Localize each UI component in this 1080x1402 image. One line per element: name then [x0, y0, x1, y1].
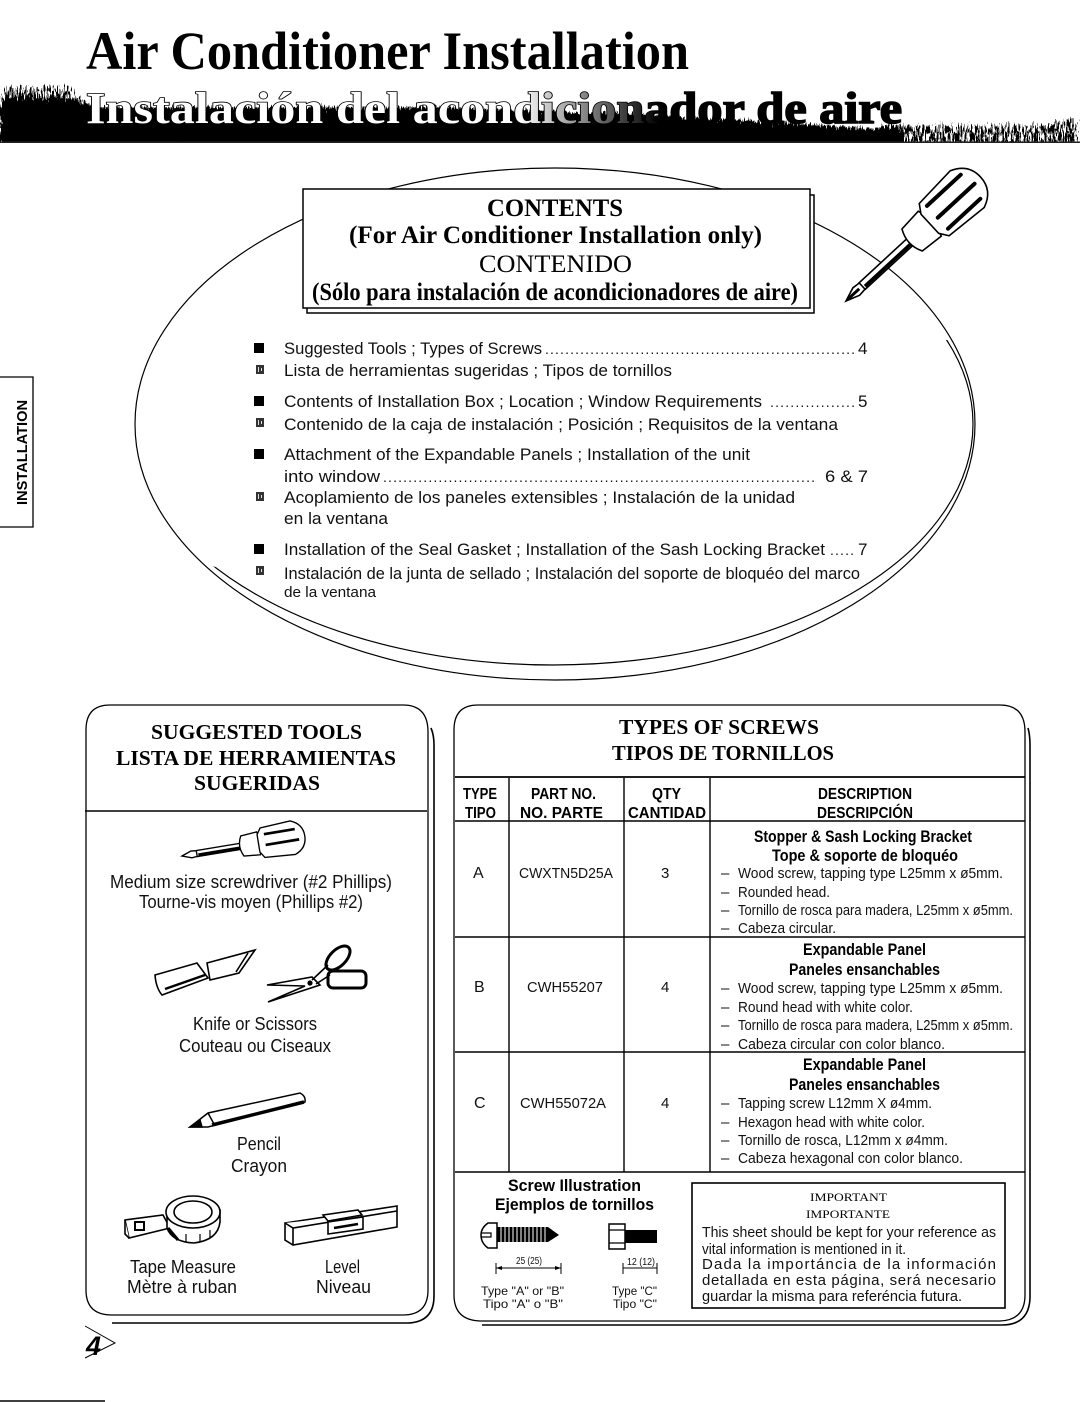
caption: tape measure: Mètre à ruban	[127, 1277, 237, 1297]
caption: screw types: Type "A" or "B"	[481, 1284, 564, 1298]
icon: tape measure	[125, 1196, 220, 1243]
caption: screw types: Tipo "C"	[613, 1297, 657, 1311]
row B: –	[721, 999, 730, 1016]
tools heading: SUGGESTED TOOLS	[151, 720, 362, 744]
row A: Wood screw, tapping type L25mm x ø5mm.	[738, 865, 1003, 882]
table header: QTY	[652, 786, 681, 803]
bullet and entry: seal gasket: 7	[858, 540, 867, 559]
caption: screw types	[481, 1284, 657, 1311]
row A: Cabeza circular.	[738, 920, 836, 937]
bullet and entry: expandable panels: en la ventana	[284, 509, 389, 528]
bullet and entry: installation box: 5	[858, 392, 867, 411]
icon: knife	[155, 950, 255, 995]
row C: Tapping screw L12mm X ø4mm.	[738, 1095, 932, 1112]
panel: suggested tools	[85, 705, 434, 1323]
row B: Tornillo de rosca para madera, L25mm x ø5mm.	[738, 1017, 1013, 1034]
table header: CANTIDAD	[628, 805, 706, 822]
caption: knife or scissors: Couteau ou Ciseaux	[179, 1036, 331, 1056]
row B: Paneles ensanchables	[789, 960, 940, 979]
caption: pencil: Pencil	[237, 1134, 281, 1154]
screws heading: TYPES OF SCREWS	[619, 715, 819, 739]
caption: screw types: Type "C"	[612, 1284, 657, 1298]
row C	[474, 1055, 963, 1167]
row C: Paneles ensanchables	[789, 1075, 940, 1094]
bullet and entry: tools: Lista de herramientas sugeridas ; Tipos de tornillos	[284, 361, 672, 380]
row A: A	[473, 865, 484, 882]
row B: –	[721, 980, 730, 997]
bullet and entry: seal gasket: Instalación de la junta de sellado ; Instalación del soporte de bloquéo del marco	[284, 564, 860, 583]
callout: important: IMPORTANT	[810, 1192, 887, 1204]
row B: 4	[661, 979, 669, 996]
row B: Wood screw, tapping type L25mm x ø5mm.	[738, 980, 1003, 997]
row C: Tornillo de rosca, L12mm x ø4mm.	[738, 1132, 948, 1149]
row A	[473, 827, 1013, 937]
contents heading box: (For Air Conditioner Installation only)	[349, 222, 762, 249]
bullet and entry: tools	[254, 339, 867, 380]
row C: –	[721, 1095, 730, 1112]
panel: types of screws	[454, 705, 1030, 1325]
icon: level	[285, 1206, 397, 1245]
bullet and entry: tools: ..............................................................	[545, 341, 855, 357]
table header: NO. PARTE	[520, 805, 603, 822]
contents ellipse outline	[133, 168, 975, 680]
bullet and entry: installation box: Contenido de la caja de instalación ; Posición ; Requisitos de la ventana	[284, 415, 839, 434]
icon: scissors	[267, 942, 366, 1002]
icon: pencil	[190, 1093, 305, 1127]
side tab: installation	[0, 377, 33, 527]
dimension: 12 (12)	[623, 1257, 657, 1274]
row C: C	[474, 1095, 486, 1112]
page number marker: 4	[85, 1331, 101, 1361]
caption: screwdriver	[110, 872, 392, 912]
caption: pencil	[231, 1134, 287, 1176]
caption: tape measure	[127, 1257, 237, 1297]
bullet and entry: expandable panels	[254, 445, 868, 528]
bullet and entry: tools: Suggested Tools ; Types of Screws	[284, 339, 542, 358]
table header: DESCRIPTION	[818, 786, 912, 803]
row A: CWXTN5D25A	[519, 865, 613, 882]
callout: important: IMPORTANTE	[806, 1209, 890, 1221]
row A: 3	[661, 865, 669, 882]
bullet and entry: expandable panels: ......................................................................................	[383, 469, 815, 485]
row B: –	[721, 1036, 730, 1053]
contents heading box: (Sólo para instalación de acondicionadores de aire)	[312, 279, 798, 306]
icon: large screwdriver	[829, 159, 997, 319]
bullet and entry: installation box: .................	[770, 394, 855, 410]
contents heading box: CONTENTS	[487, 195, 623, 222]
bullet and entry: installation box	[254, 392, 867, 434]
row A: –	[721, 865, 730, 882]
callout: important	[692, 1183, 1005, 1308]
dimension: 25 (25): 25 (25)	[516, 1256, 542, 1267]
row B: B	[474, 979, 485, 996]
callout: important: Dada la importáncia de la información	[702, 1256, 996, 1273]
dimension: 12 (12): 12 (12)	[627, 1257, 655, 1268]
caption: level	[316, 1257, 371, 1297]
caption: knife or scissors	[179, 1014, 331, 1056]
bullet and entry: expandable panels: into window	[284, 467, 381, 486]
row A: Tope & soporte de bloquéo	[772, 846, 958, 865]
row C: CWH55072A	[520, 1095, 606, 1112]
bullet and entry: installation box: Contents of Installation Box ; Location ; Window Requirements	[284, 392, 762, 411]
subtitle band: Spanish title on grainy black: Instalación del acondicionador de aire	[86, 84, 902, 133]
bullet and entry: tools: 4	[858, 339, 867, 358]
row A: Rounded head.	[738, 884, 830, 901]
row B: Expandable Panel	[803, 940, 926, 959]
row C: –	[721, 1150, 730, 1167]
bullet and entry: expandable panels: Acoplamiento de los paneles extensibles ; Instalación de la unidad	[284, 488, 795, 507]
row B	[474, 940, 1013, 1053]
icon: screw type C	[609, 1224, 657, 1249]
screw illustration heading	[495, 1176, 654, 1214]
table header: TIPO	[465, 805, 496, 822]
row A: –	[721, 920, 730, 937]
caption: screw types: Tipo "A" o "B"	[483, 1297, 563, 1311]
row C: Cabeza hexagonal con color blanco.	[738, 1150, 963, 1167]
tools heading	[116, 720, 396, 795]
contents heading box: CONTENIDO	[479, 251, 632, 278]
caption: screwdriver: Tourne-vis moyen (Phillips #2)	[139, 892, 363, 912]
subtitle band: Spanish title on grainy black	[0, 84, 1080, 153]
caption: level: Level	[325, 1257, 360, 1277]
bullet and entry: seal gasket: de la ventana	[284, 584, 377, 601]
dimension: 25 (25)	[496, 1256, 561, 1274]
table header: TYPE	[463, 786, 497, 803]
bullet and entry: seal gasket: Installation of the Seal Gasket ; Installation of the Sash Locking Bracket	[284, 540, 825, 559]
screw illustration heading: Ejemplos de tornillos	[495, 1195, 654, 1214]
title: Air Conditioner Installation: Air Conditioner Installation	[86, 21, 689, 81]
bullet and entry: seal gasket	[254, 540, 867, 601]
tools heading: SUGERIDAS	[194, 771, 320, 795]
row A: –	[721, 884, 730, 901]
row B: CWH55207	[527, 979, 603, 996]
row C: –	[721, 1114, 730, 1131]
row C: Expandable Panel	[803, 1055, 926, 1074]
screws heading: TIPOS DE TORNILLOS	[612, 741, 834, 765]
row C: 4	[661, 1095, 669, 1112]
bullet and entry: expandable panels: Attachment of the Expandable Panels ; Installation of the unit	[284, 445, 750, 464]
icon: medium screwdriver	[179, 819, 308, 873]
caption: tape measure: Tape Measure	[130, 1257, 236, 1277]
page number marker	[85, 1326, 115, 1361]
callout: important: detallada en esta página, será necesario	[702, 1272, 996, 1289]
icon: screw type A or B	[481, 1223, 559, 1248]
tools heading: LISTA DE HERRAMIENTAS	[116, 746, 396, 770]
row C: –	[721, 1132, 730, 1149]
contents list	[254, 339, 868, 601]
bullet and entry: seal gasket: .....	[830, 542, 854, 558]
caption: level: Niveau	[316, 1277, 371, 1297]
callout: important: vital information is mentioned in it.	[702, 1241, 906, 1258]
row A: Tornillo de rosca para madera, L25mm x ø5mm.	[738, 902, 1013, 919]
bullet and entry: expandable panels: 6 & 7	[825, 467, 868, 486]
caption: knife or scissors: Knife or Scissors	[193, 1014, 317, 1034]
contents heading box	[303, 189, 814, 313]
row B: Cabeza circular con color blanco.	[738, 1036, 945, 1053]
table header: PART NO.	[531, 786, 596, 803]
row A: Stopper & Sash Locking Bracket	[754, 827, 972, 846]
side tab: installation: INSTALLATION	[14, 400, 31, 505]
table header	[463, 786, 913, 822]
row B: –	[721, 1017, 730, 1034]
screws heading	[612, 715, 834, 765]
callout: important: guardar la misma para referéncia futura.	[702, 1288, 962, 1305]
table header: DESCRIPCIÓN	[817, 803, 913, 822]
row C: Hexagon head with white color.	[738, 1114, 925, 1131]
caption: screwdriver: Medium size screwdriver (#2 Phillips)	[110, 872, 392, 892]
table grid	[455, 777, 1025, 1172]
caption: pencil: Crayon	[231, 1156, 287, 1176]
row B: Round head with white color.	[738, 999, 913, 1016]
callout: important: This sheet should be kept for your reference as	[702, 1224, 996, 1241]
row A: –	[721, 902, 730, 919]
screw illustration heading: Screw Illustration	[508, 1176, 641, 1195]
